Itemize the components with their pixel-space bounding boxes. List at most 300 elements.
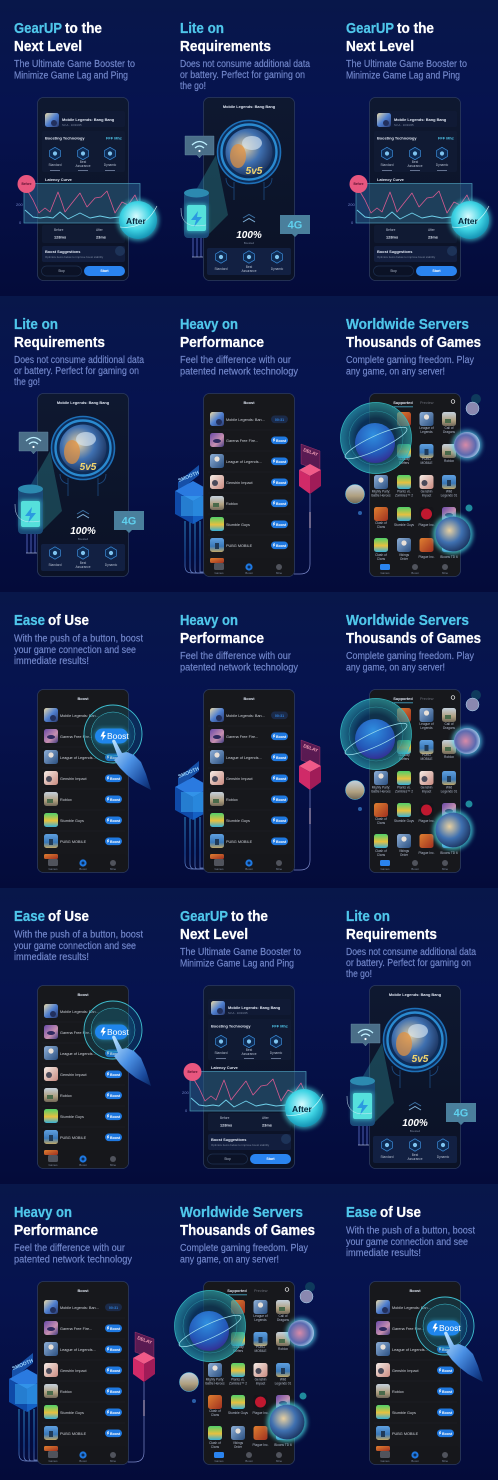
delay cube [128,1332,155,1462]
phone grid: Stumble Guys [228,1411,248,1415]
heading: Thousands of Games [346,335,481,351]
phone grid: Roblox [444,755,454,759]
phone list: League of Legends... [60,756,96,760]
wifi badge [185,136,214,158]
phone grid: Boost [411,867,419,871]
subtitle [14,1243,132,1266]
latency chart: 0 [19,220,22,225]
subtitle [346,355,474,378]
phone list: Boost [110,777,121,781]
phone list: Mine [442,1459,448,1463]
phone grid: Subway [398,457,410,461]
heading: Next Level [14,39,82,55]
phone: 5v5 [412,1054,429,1065]
phone: Mobile Legends: Bang Bang [57,400,110,405]
subtitle [346,947,476,980]
delay cube: DELAY [137,1335,153,1345]
phone grid: Clash of [375,817,387,821]
subtitle [180,947,301,970]
phone: Standard [49,563,62,567]
phone grid: Zombies™ 2 [229,1382,247,1386]
phone list: Boost [442,1348,453,1352]
planet [340,698,412,770]
heading: Ease [14,909,45,925]
heading: Worldwide Servers [346,613,469,629]
boost button with rings [84,1001,142,1059]
heading [346,613,481,647]
phone grid: Preview [420,697,434,701]
phone list: League of Legends... [60,1348,96,1352]
phone: Optimize items below to improve boost stability [377,255,436,259]
subtitle [180,59,310,92]
battery [15,451,62,553]
phone list: PUBG MOBILE [60,1136,87,1140]
hand [112,1036,151,1086]
phone list: Games [380,1459,390,1463]
latency chart: 0 [351,220,354,225]
phone grid: Wild [446,786,452,790]
heading [346,1205,421,1221]
phone list: Mine [110,867,116,871]
phone list: Roblox [60,798,72,802]
phone list: PUBG MOBILE [392,1432,419,1436]
phone list: Boost [276,840,287,844]
phone list: Boost [79,867,87,871]
phone grid: Impact [422,790,431,794]
phone list [38,1282,128,1464]
phone list: Boost [110,1073,121,1077]
phone: Stop [58,269,65,273]
phone list: Boost [79,1459,87,1463]
phone: Latency Curve [377,177,405,182]
phone grid: Surfers [399,461,410,465]
phone grid: Bloons TD 6 [440,555,458,559]
after badge: After [292,1104,313,1114]
phone grid: Dragons [443,430,455,434]
smooth cube: SMOOTH [178,766,200,780]
panel: Lite r1c2 [166,0,332,296]
subtitle: your game connection and see [14,645,136,656]
panel: Heavy r3c2 [166,592,332,888]
game bubbles [180,1282,316,1442]
phone list: Boost [110,1411,121,1415]
phone [38,394,128,576]
subtitle [14,930,143,963]
phone list: PUBG MOBILE [226,840,253,844]
phone list: Mobile Legends: Ban... [60,1010,99,1014]
phone list: Mobile Legends: Ban... [60,1306,99,1310]
phone list: Boost [110,798,121,802]
phone: Mobile Legends: Bang Bang [223,104,276,109]
phone list: Garena Free Fire... [392,1327,424,1331]
delay cube: DELAY [303,743,319,753]
hand [444,1332,483,1382]
phone list: Boost [276,439,287,443]
phone grid: Stumble Guys [394,523,414,527]
phone: Boosted [244,241,255,245]
heading: to the [65,21,102,37]
phone list: League of Legends... [392,1348,428,1352]
phone grid: Clans [377,557,385,561]
phone: 23ms [428,234,438,240]
phone list: Boost [442,1411,453,1415]
after badge [283,1087,325,1129]
before badge [18,175,36,193]
phone list: Boost [110,1327,121,1331]
subtitle [180,355,298,378]
phone grid: Surfers [233,1349,244,1353]
heading [14,613,89,629]
phone list: League of Legends... [60,1052,96,1056]
phone list: Games [214,571,224,575]
phone: Optimize items below to improve boost stability [45,255,104,259]
phone grid: League of [419,722,434,726]
phone: Mobile Legends: Bang Bang [62,117,115,122]
before badge: Before [187,1070,198,1074]
subtitle: The Ultimate Game Booster to [14,59,135,70]
planet [340,402,412,474]
phone grid: Wild [446,490,452,494]
phone list: Genshin Impact [226,481,254,485]
phone list: Boost [110,1115,121,1119]
panel: Ease r3c1 [0,592,166,888]
heading [180,1205,315,1239]
smooth cube [175,465,211,573]
phone grid: Supported [393,696,413,701]
phone grid: Mighty Party: [206,1378,224,1382]
phone grid: Battle Heroes [371,494,391,498]
phone: Best [412,1153,418,1157]
phone: 128ms [220,1122,232,1128]
phone list: Roblox [60,1094,72,1098]
phone list: Boost [245,571,253,575]
panel: Heavy r5c1 [0,1184,166,1480]
heading: of Use [380,1205,421,1221]
phone: FFF Mhz [106,136,122,140]
phone list: Games [48,867,58,871]
phone grid: Clash of [375,553,387,557]
heading [346,909,437,943]
phone list: Mobile Legends: Ban... [60,714,99,718]
phone grid: Supported [393,400,413,405]
heading: Lite on [14,317,58,333]
phone grid: Zombies™ 2 [395,494,413,498]
phone: Before [220,1116,230,1120]
phone grid: Games [380,867,390,871]
subtitle: Minimize Game Lag and Ping [180,958,294,970]
phone grid: Games [214,1459,224,1463]
subtitle: The Ultimate Game Booster to [346,59,467,70]
phone list: Garena Free Fire... [226,439,258,443]
phone grid: Legends 01 [441,494,458,498]
phone grid: Bloons TD 6 [440,851,458,855]
phone: Assurance [75,164,91,168]
phone list: Stumble Guys [60,1115,84,1119]
planet [174,1290,246,1362]
after badge: After [458,216,479,226]
panel: Lite r4c3 [332,888,498,1184]
heading [180,317,264,351]
phone: 128ms [386,234,398,240]
phone list: Roblox [60,1390,72,1394]
phone list: Stumble Guys [60,819,84,823]
phone grid: Legends [420,430,433,434]
subtitle: any game, on any server! [346,366,445,378]
heading: Performance [180,631,264,647]
heading: of Use [48,909,89,925]
phone list: Boost [442,1432,453,1436]
phone grid: Genshin [255,1378,267,1382]
heading: Heavy on [180,613,238,629]
delay cube: DELAY [303,447,319,457]
phone list: Mobile Legends: Ban... [226,714,265,718]
game bubbles [346,394,482,554]
heading: Worldwide Servers [346,317,469,333]
phone grid: Legends 01 [275,1382,292,1386]
phone: Start [266,1157,275,1161]
phone list: Games [214,867,224,871]
phone: Best [80,160,86,164]
phone [370,98,460,280]
phone: Mobile Legends: Bang Bang [228,1005,281,1010]
phone list: Boost [110,1052,121,1056]
phone grid: Clash of [375,521,387,525]
subtitle: the go! [180,81,206,92]
heading: Lite on [346,909,390,925]
phone list: Boost [276,502,287,506]
boost button with rings [84,705,142,763]
phone: Latency Curve [211,1065,239,1070]
heading: to the [397,21,434,37]
phone grid: Wild [280,1378,286,1382]
phone grid: Plague Inc. [419,819,435,823]
heading: Heavy on [14,1205,72,1221]
phone list: Mobile Legends: Ban... [392,1306,431,1310]
heading: Thousands of Games [180,1223,315,1239]
wifi badge [351,1024,380,1046]
phone grid: Plague Inc. [419,523,435,527]
phone grid: Zombies™ 2 [395,790,413,794]
latency chart [182,1072,306,1113]
phone: Boost Suggestions [211,1137,246,1142]
phone: Before [54,228,64,232]
phone [370,986,460,1168]
phone grid: League of [419,426,434,430]
subtitle: Complete gaming freedom. Play [346,651,474,662]
phone: SV-A · 10/23/25 [228,1011,248,1015]
phone list: Boost [409,1288,421,1293]
subtitle: immediate results! [14,656,89,667]
phone: Best [246,265,252,269]
phone: Assurance [407,1157,423,1161]
phone: Dynamic [270,1051,283,1055]
phone grid: PUBG [256,1345,266,1349]
phone: Mobile Legends: Bang Bang [389,992,442,997]
4G badge: 4G [454,1108,468,1120]
phone grid: Vikings [399,849,410,853]
phone list: Boost [411,1459,419,1463]
smooth cube [9,1353,45,1461]
phone: Assurance [241,269,257,273]
phone list: Boost [442,1390,453,1394]
phone list: Games [48,1163,58,1167]
phone grid: Clans [377,525,385,529]
phone grid: Legends [254,1318,267,1322]
phone: Stop [390,269,397,273]
boost button with rings: Boost [107,731,129,741]
phone list: Garena Free Fire... [226,735,258,739]
phone list: Boost [276,777,287,781]
phone: Standard [49,163,62,167]
phone list: Boost [276,523,287,527]
phone grid [370,394,460,576]
phone: Standard [381,163,394,167]
wifi badge [19,432,48,454]
phone: Boosting Technology [45,136,85,140]
latency chart: 0 [185,1108,188,1113]
phone: After [96,228,104,232]
phone grid: Dragons [277,1318,289,1322]
latency chart: 200 [16,202,23,207]
subtitle: any game, on any server! [180,1254,279,1266]
phone: After [262,1116,270,1120]
phone: Optimize items below to improve boost stability [211,1143,270,1147]
phone: 23ms [262,1122,272,1128]
heading: Requirements [346,927,437,943]
heading: GearUP [14,21,62,37]
phone grid: Mine [442,867,448,871]
phone list: Genshin Impact [60,1369,88,1373]
phone: Assurance [407,164,423,168]
phone: Boost Suggestions [377,249,412,254]
phone grid: Call of [278,1314,288,1318]
phone list [38,690,128,872]
phone grid: Plants vs. [397,490,411,494]
subtitle [14,355,144,388]
phone list: Boost [276,756,287,760]
phone list: Roblox [392,1390,404,1394]
phone list: Boost [77,696,89,701]
subtitle: patented network technology [180,662,298,674]
phone grid: Mighty Party: [372,786,390,790]
phone grid: League of [253,1314,268,1318]
phone grid: Games [380,571,390,575]
panel: GearUP r1c3 [332,0,498,296]
phone: 100% [236,230,262,241]
subtitle [346,1226,475,1259]
latency chart [16,184,140,225]
battery [347,1043,394,1145]
phone grid: Mighty Party: [372,490,390,494]
phone: SV-A · 10/23/25 [394,123,414,127]
panel: Ease r5c3 [332,1184,498,1480]
phone grid: Legends [420,726,433,730]
phone grid: Call of [444,722,454,726]
heading: Next Level [346,39,414,55]
subtitle: patented network technology [14,1254,132,1266]
after badge [449,199,491,241]
subtitle: any game, on any server! [346,662,445,674]
latency chart: 200 [182,1090,189,1095]
phone list: PUBG MOBILE [226,544,253,548]
phone list: PUBG MOBILE [60,840,87,844]
phone list: Boost [110,1136,121,1140]
subtitle: Complete gaming freedom. Play [346,355,474,366]
phone: SV-A · 10/23/25 [62,123,82,127]
phone grid: Order [400,853,409,857]
subtitle: With the push of a button, boost [14,634,143,644]
subtitle: or battery. Perfect for gaming on [180,70,305,81]
phone: Boosting Technology [211,1024,251,1028]
phone list: Garena Free Fire... [60,1327,92,1331]
phone grid: Boost [245,1459,253,1463]
subtitle: With the push of a button, boost [346,1226,475,1236]
phone list: Boost [110,819,121,823]
phone list: Genshin Impact [60,777,88,781]
phone grid: Plague Inc. [253,1443,269,1447]
heading [14,21,102,55]
heading: Ease [346,1205,377,1221]
4G badge: 4G [122,516,136,528]
phone: 128ms [54,234,66,240]
phone grid: Supported [227,1288,247,1293]
game bubbles [346,690,482,850]
before badge [184,1063,202,1081]
phone list: Boost [276,460,287,464]
4G badge [280,215,310,237]
subtitle [180,651,298,674]
phone list [204,394,294,576]
phone list: 00:31 [275,714,284,718]
phone grid [370,690,460,872]
heading [180,909,268,943]
delay cube [294,740,321,870]
phone list: Boost [276,798,287,802]
phone list [370,1282,460,1464]
heading [180,613,264,647]
4G badge [446,1103,476,1125]
boost button with rings [416,1297,474,1355]
phone: 5v5 [80,462,97,473]
phone list: Boost [276,819,287,823]
subtitle: Feel the difference with our [180,651,292,662]
subtitle: The Ultimate Game Booster to [180,947,301,958]
heading: Requirements [14,335,105,351]
phone: Standard [215,1051,228,1055]
subtitle: Does not consume additional data [346,947,476,958]
before badge: Before [353,182,364,186]
before badge: Before [21,182,32,186]
phone list: 00:31 [109,1306,118,1310]
phone grid: Clash of [209,1409,221,1413]
battery [181,155,228,257]
subtitle: the go! [346,969,372,980]
phone grid: Stumble Guys [394,819,414,823]
subtitle [346,59,467,82]
latency chart [348,184,472,225]
heading [14,317,105,351]
phone list: Genshin Impact [392,1369,420,1373]
phone list: Stumble Guys [392,1411,416,1415]
phone list: Boost [77,1288,89,1293]
panel: Lite r2c1 [0,296,166,592]
phone list [204,690,294,872]
phone grid: Mine [442,571,448,575]
phone list: Boost [243,696,255,701]
subtitle: Does not consume additional data [14,355,144,366]
subtitle [14,634,143,667]
phone list: Mobile Legends: Ban... [226,418,265,422]
